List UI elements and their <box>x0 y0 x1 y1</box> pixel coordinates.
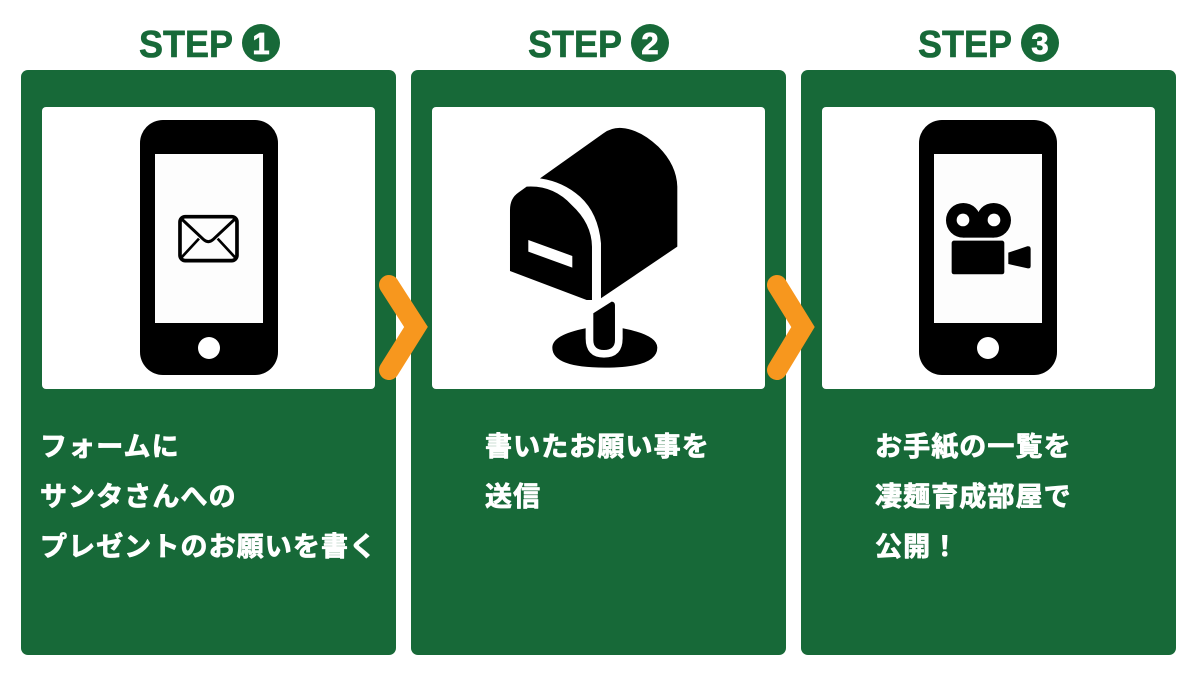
text: step 3 description: お手紙の一覧を <box>875 432 1072 462</box>
arrow: step 1 to step 2 <box>389 285 416 370</box>
text: step 2 description <box>485 432 710 512</box>
text: step 2 description: 送信 <box>485 482 541 512</box>
text: step 1 description: フォームに <box>40 432 180 462</box>
heading: step 3: STEP <box>918 24 1012 66</box>
panel: step 3 <box>801 70 1176 655</box>
icon: smartphone with envelope <box>140 120 278 375</box>
text: step 3 description <box>875 432 1072 562</box>
icon: mailbox <box>510 128 677 368</box>
text: step 3 description: 公開！ <box>875 532 959 562</box>
text: step 2 description: 書いたお願い事を <box>485 432 710 462</box>
text: step 1 description: サンタさんへの <box>40 482 237 512</box>
heading: step 2: 2 <box>641 26 659 61</box>
panel: step 2 <box>411 70 786 655</box>
text: step 1 description <box>40 432 377 562</box>
arrow: step 2 to step 3 <box>777 285 803 370</box>
icon: smartphone with movie camera <box>919 120 1057 375</box>
heading: step 3: 3 <box>1031 26 1049 61</box>
heading: step 2: STEP <box>528 24 622 66</box>
heading: step 1: STEP <box>139 24 233 66</box>
text: step 1 description: プレゼントのお願いを書く <box>40 531 377 562</box>
text: step 3 description: 凄麺育成部屋で <box>875 482 1072 512</box>
heading: step 1: 1 <box>252 26 270 61</box>
panel: step 1 <box>21 70 396 655</box>
